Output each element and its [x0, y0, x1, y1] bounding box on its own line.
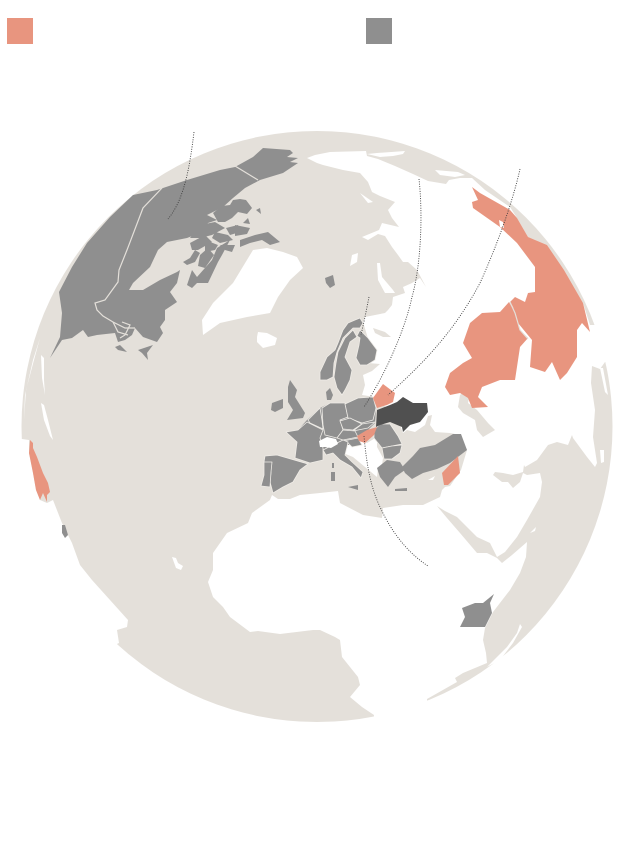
- Russian Far East: [472, 187, 590, 380]
- Finland: [356, 330, 377, 365]
- Turkey: [402, 434, 467, 479]
- leader: Arctic to Poland: [364, 179, 421, 407]
- border: Alaska: [235, 166, 258, 180]
- Belarus: [373, 384, 395, 408]
- Sicily: [348, 485, 358, 490]
- Sweden: [334, 330, 357, 395]
- leader: North America: [168, 132, 194, 219]
- Italy: [323, 440, 363, 478]
- leader: Asia to Belarus: [388, 169, 520, 395]
- Benelux: [308, 408, 323, 429]
- Balkans: no-data land: [342, 437, 383, 477]
- globe disc: ocean: [22, 131, 612, 722]
- Czechia: [340, 418, 362, 430]
- land: Eurasia and Africa: [208, 151, 640, 760]
- Sardinia: [331, 472, 335, 481]
- border between pink regions: [510, 302, 528, 339]
- leader: Scandinavia: [361, 297, 369, 335]
- Bulgaria: [382, 445, 402, 459]
- Congo grey country: [460, 594, 494, 627]
- pink countries: [29, 187, 590, 502]
- Ireland: [271, 399, 283, 412]
- Svalbard: [325, 275, 335, 288]
- Corsica: [332, 463, 334, 468]
- border: Canada and USA: [95, 188, 162, 328]
- Germany: [322, 403, 348, 438]
- leader lines: [168, 132, 520, 566]
- North America grey countries: [50, 148, 335, 360]
- Hungary: [357, 427, 377, 443]
- Cyprus: [428, 476, 435, 480]
- Norway: [320, 318, 363, 380]
- central Europe base: [286, 397, 376, 463]
- Croatia: [343, 438, 362, 447]
- Gulf islands: [115, 345, 127, 352]
- Baja grey country: [62, 525, 68, 538]
- Switzerland: [319, 437, 338, 448]
- legend swatch: pink: [7, 18, 33, 44]
- Spain: [264, 455, 308, 493]
- Ukraine: [376, 397, 428, 432]
- Austria: [337, 430, 358, 440]
- Europe grey countries: [261, 318, 467, 493]
- Arctic archipelago: [183, 199, 280, 288]
- Poland: [345, 397, 376, 423]
- Crete: [395, 488, 407, 491]
- Syria and Iraq strip: [442, 456, 460, 485]
- Central Asia: [445, 302, 528, 408]
- Slovakia: [353, 422, 375, 431]
- White Sea: [373, 328, 391, 337]
- California strip: [29, 440, 50, 502]
- Greece: [377, 460, 405, 487]
- Portugal: [261, 462, 272, 487]
- land: Pacific side mask: [0, 430, 128, 700]
- Greenland: [202, 248, 303, 335]
- legend swatch: grey: [366, 18, 392, 44]
- leader: Hungary: [364, 436, 428, 566]
- Great Lakes: [113, 322, 128, 335]
- Iceland: [257, 332, 277, 348]
- United Kingdom: [287, 380, 305, 420]
- France: [286, 422, 323, 463]
- land: arctic islands and slivers: [24, 151, 608, 667]
- globe map: [0, 131, 640, 760]
- Denmark: [326, 388, 333, 400]
- Romania: [374, 424, 402, 448]
- Canada and USA landmass: [50, 148, 298, 358]
- Caspian Sea: [458, 390, 495, 437]
- small lake: [499, 220, 504, 228]
